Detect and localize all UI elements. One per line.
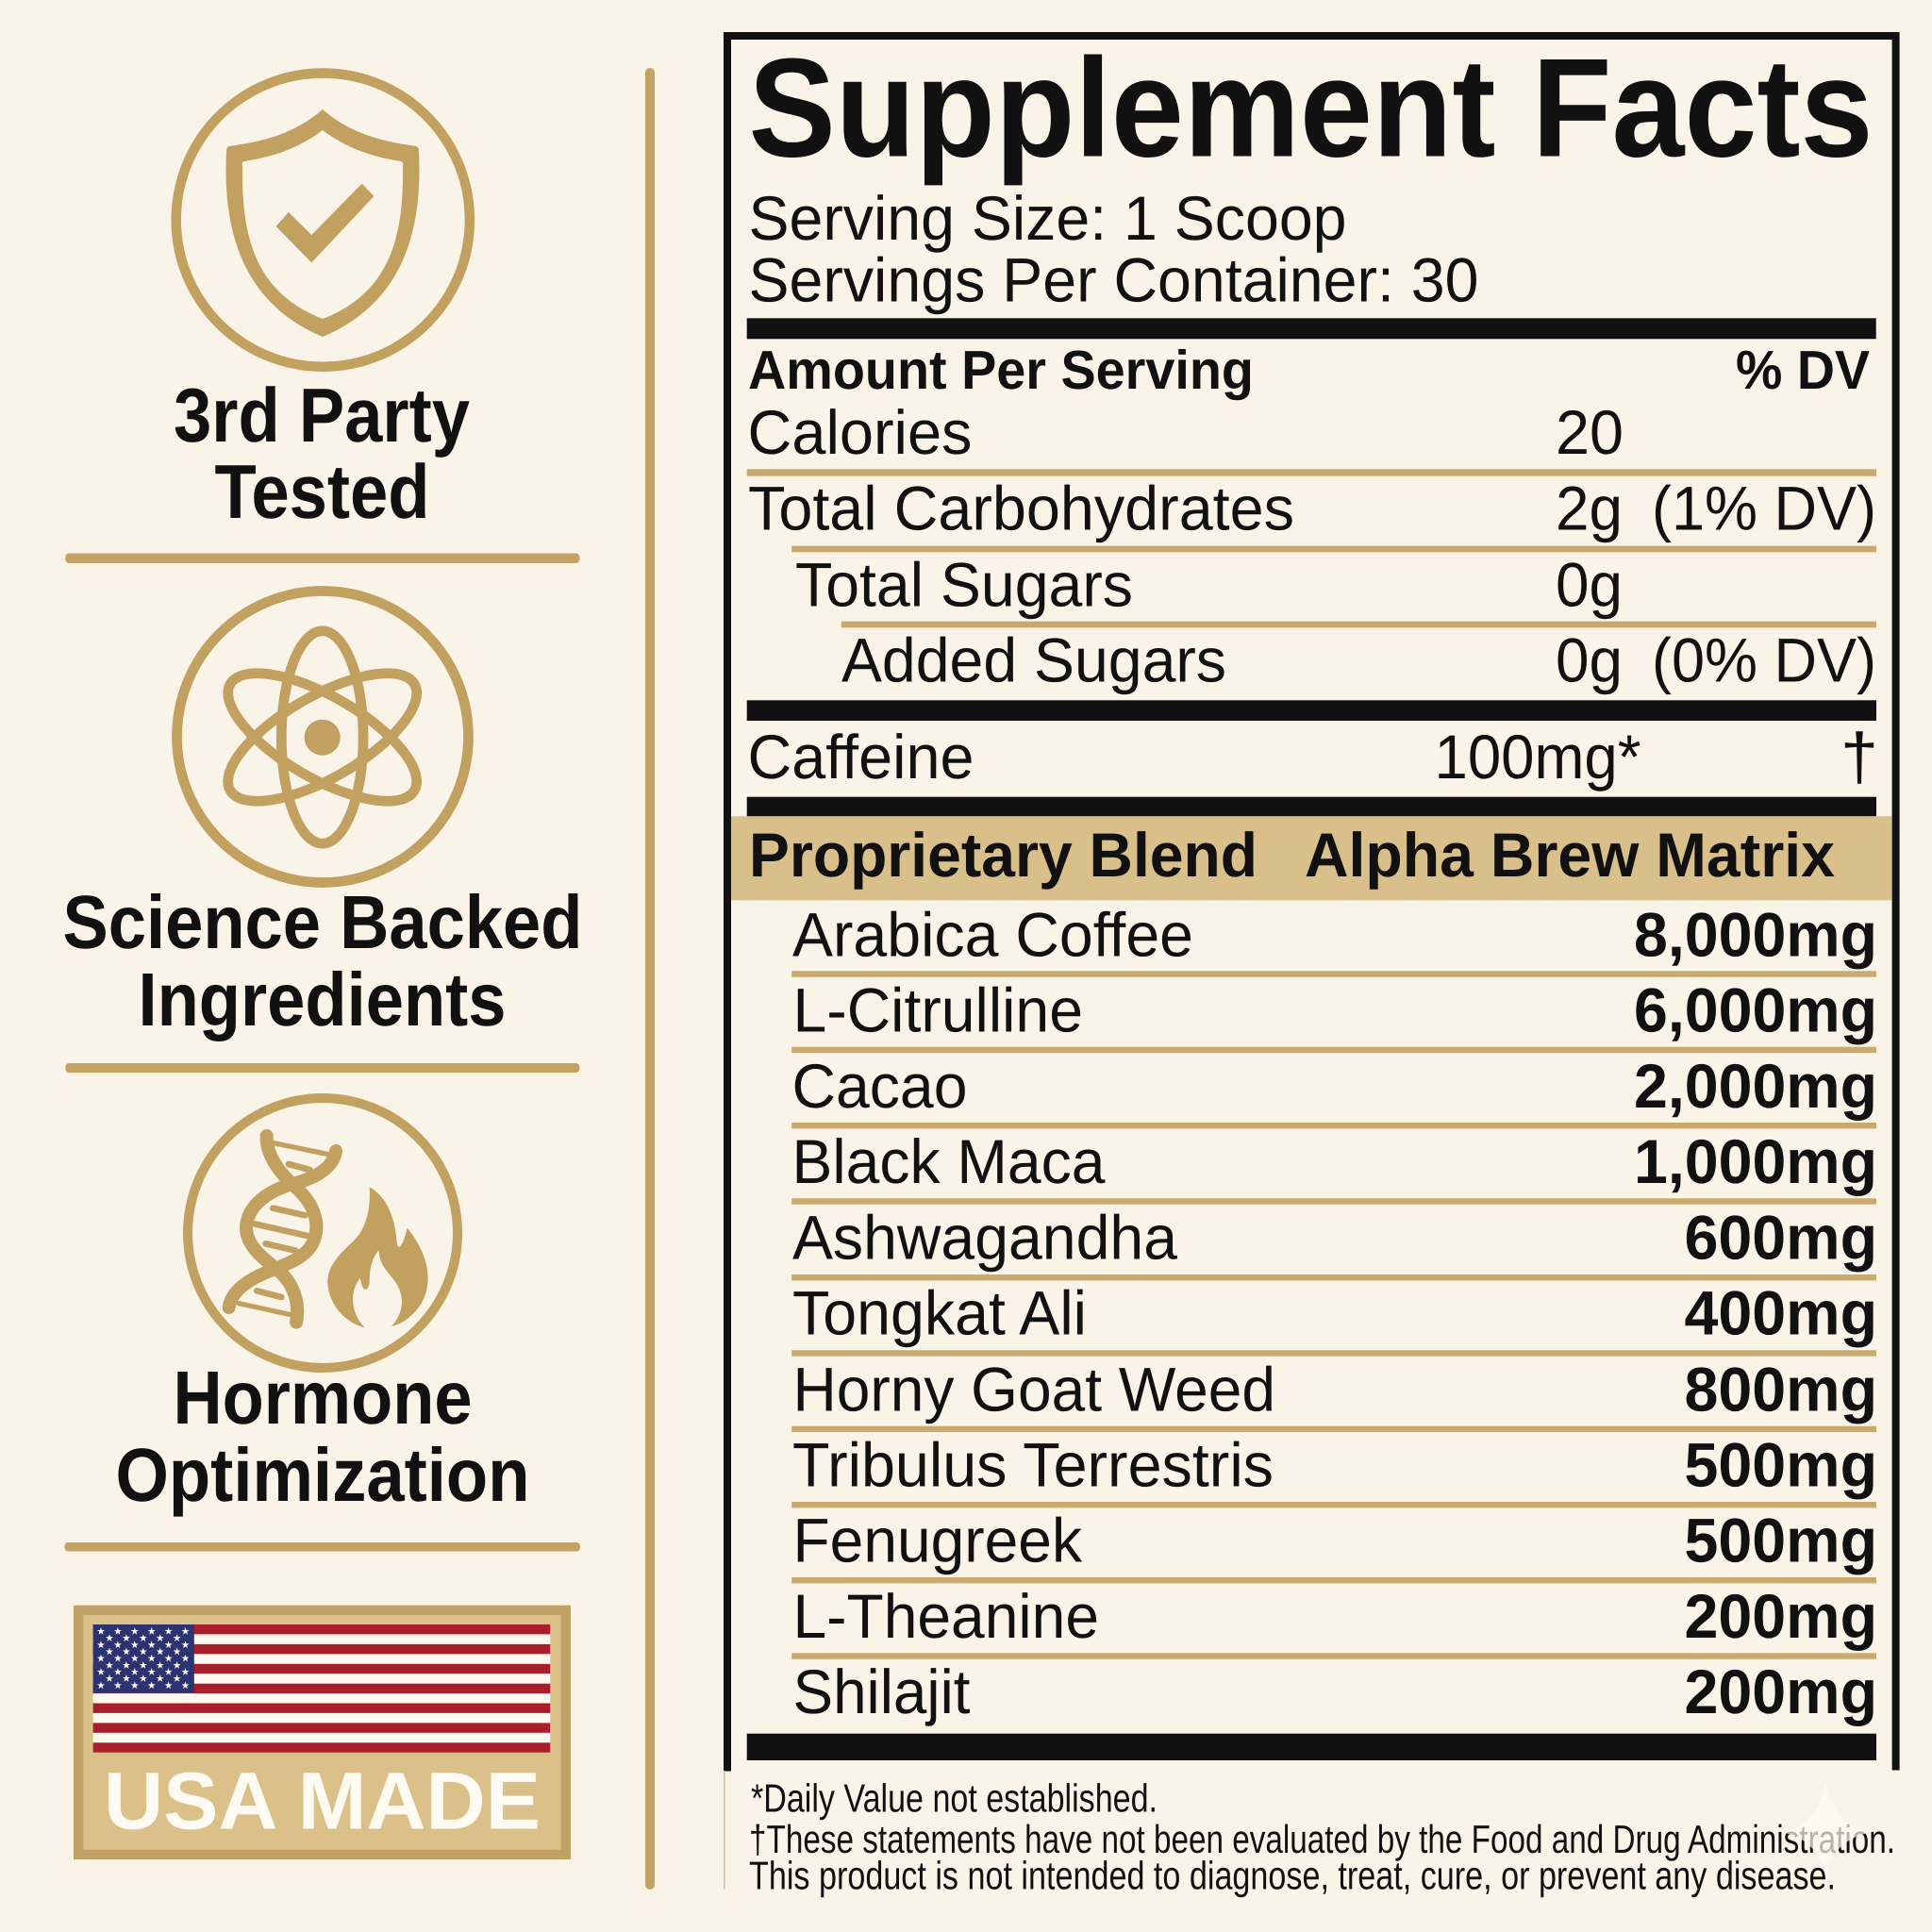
row: Shilajit: [792, 1657, 1877, 1726]
row: Total Carbohydrates: 2g: [1556, 474, 1623, 543]
proprietary blend band: [731, 816, 1892, 900]
row: Calories: [747, 397, 1624, 467]
title: Supplement Facts: [749, 28, 1874, 187]
row: Caffeine: 100mg*: [1434, 722, 1641, 791]
row: Arabica Coffee: 8,000mg: [1634, 899, 1877, 969]
row: Added Sugars: (0% DV): [1652, 625, 1876, 694]
row: L-Theanine: [792, 1581, 1877, 1651]
row: Caffeine: †: [1840, 720, 1878, 793]
row: Caffeine: Caffeine: [747, 722, 974, 791]
row: Black Maca: 1,000mg: [1634, 1126, 1877, 1196]
row: Caffeine: [747, 720, 1878, 793]
badge: 3rd Party Tested: [174, 74, 470, 535]
row: Horny Goat Weed: 800mg: [1685, 1355, 1877, 1424]
amount per serving header: [748, 340, 1870, 401]
label: USA MADE: USA MADE: [104, 1756, 541, 1846]
row: Fenugreek: 500mg: [1685, 1506, 1877, 1575]
serving information: Servings Per Container: 30: [749, 245, 1479, 315]
row: L-Theanine: L-Theanine: [792, 1581, 1099, 1651]
icon: American flag: [93, 1624, 550, 1753]
row: L-Citrulline: 6,000mg: [1634, 975, 1877, 1045]
row: Added Sugars: Added Sugars: [841, 625, 1226, 694]
row: Calories: Calories: [747, 397, 972, 467]
proprietary blend band: Proprietary Blend: [749, 820, 1257, 890]
row: Total Carbohydrates: [748, 474, 1876, 543]
icon: shield with check: [176, 74, 470, 367]
label: Science Backed Ingredients: Science Backed: [62, 880, 583, 964]
label: Hormone Optimization: Optimization: [115, 1433, 530, 1517]
amount per serving header: Amount Per Serving: [748, 340, 1254, 401]
row: L-Citrulline: [792, 975, 1877, 1045]
row: Total Sugars: Total Sugars: [795, 549, 1133, 619]
row: Horny Goat Weed: [792, 1355, 1877, 1424]
panel: Supplement Facts label: [724, 28, 1896, 1898]
footnotes: *Daily Value not established.: [751, 1776, 1158, 1821]
row: Total Sugars: 0g: [1556, 549, 1623, 619]
row: Calories: 20: [1556, 397, 1624, 467]
icon: atom: [177, 591, 468, 883]
row: Arabica Coffee: [792, 899, 1877, 969]
row: Arabica Coffee: Arabica Coffee: [792, 899, 1193, 969]
row: Tribulus Terrestris: [792, 1430, 1877, 1500]
badge: Hormone Optimization: [115, 1098, 530, 1517]
row: L-Citrulline: L-Citrulline: [792, 975, 1083, 1045]
label: 3rd Party Tested: 3rd Party: [174, 374, 470, 458]
row: Shilajit: 200mg: [1685, 1657, 1877, 1726]
label: 3rd Party Tested: [174, 374, 470, 535]
row: Shilajit: Shilajit: [792, 1657, 970, 1726]
row: Tongkat Ali: [792, 1278, 1877, 1348]
row: Tribulus Terrestris: Tribulus Terrestris: [792, 1430, 1274, 1500]
row: Tongkat Ali: 400mg: [1685, 1278, 1877, 1348]
row: Tribulus Terrestris: 500mg: [1685, 1430, 1877, 1500]
row: Black Maca: Black Maca: [792, 1126, 1106, 1196]
proprietary blend band: Alpha Brew Matrix: [1305, 820, 1835, 890]
panel frame: [727, 36, 1896, 1772]
row: Total Carbohydrates: (1% DV): [1652, 474, 1876, 543]
column divider: [645, 68, 655, 1890]
label: Science Backed Ingredients: Ingredients: [138, 958, 506, 1041]
label: Hormone Optimization: Hormone: [174, 1356, 472, 1440]
row: Tongkat Ali: Tongkat Ali: [792, 1278, 1087, 1348]
row: Black Maca: [792, 1126, 1877, 1196]
icon: DNA and flame: [188, 1098, 458, 1368]
row: Fenugreek: Fenugreek: [792, 1506, 1083, 1575]
label: Hormone Optimization: [115, 1356, 530, 1517]
row: Cacao: 2,000mg: [1634, 1051, 1877, 1121]
row: Added Sugars: [841, 625, 1876, 694]
row: Total Sugars: [795, 549, 1623, 619]
row: Total Carbohydrates: Total Carbohydrates: [748, 474, 1294, 543]
label: 3rd Party Tested: Tested: [215, 450, 430, 535]
row: Added Sugars: 0g: [1556, 625, 1623, 694]
footnotes: [749, 1776, 1895, 1898]
row: Ashwagandha: Ashwagandha: [792, 1202, 1177, 1272]
row: Horny Goat Weed: Horny Goat Weed: [792, 1355, 1275, 1424]
serving information: Serving Size: 1 Scoop: [749, 183, 1347, 253]
badge: Science Backed Ingredients: [62, 591, 583, 1041]
serving information: [749, 183, 1479, 315]
row: Cacao: [792, 1051, 1877, 1121]
label: Science Backed Ingredients: [62, 880, 583, 1041]
amount per serving header: % DV: [1736, 340, 1870, 401]
row: Ashwagandha: [792, 1202, 1877, 1272]
row: L-Theanine: 200mg: [1685, 1581, 1877, 1651]
icon: faint sparkle watermark: [1781, 1781, 1873, 1877]
badge: USA Made: [74, 1606, 571, 1859]
row: Fenugreek: [792, 1506, 1877, 1575]
row: Cacao: Cacao: [792, 1051, 968, 1121]
row: Ashwagandha: 600mg: [1685, 1202, 1877, 1272]
